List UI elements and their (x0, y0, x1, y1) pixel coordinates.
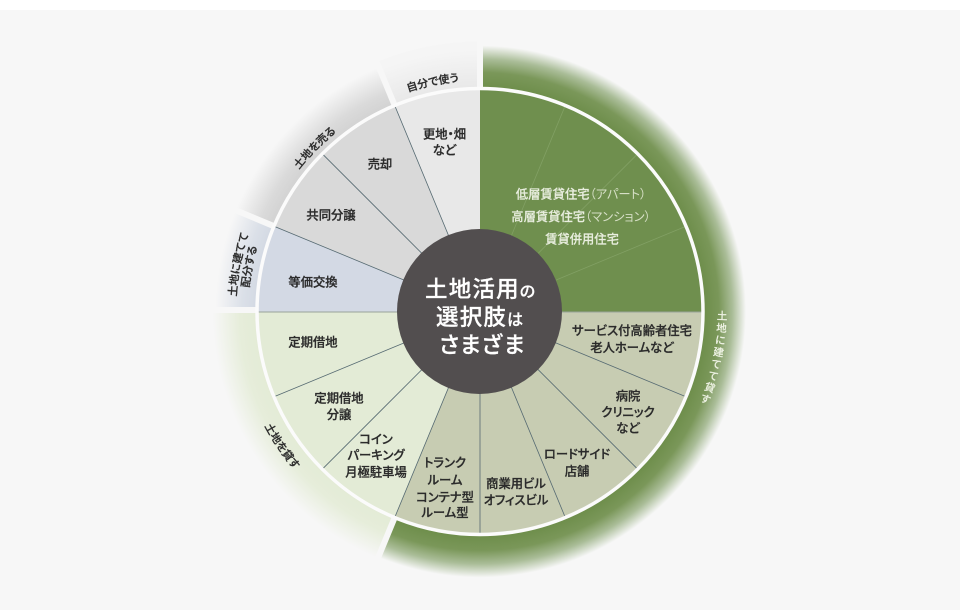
outer label: 土地に建てて貸す: て (710, 358, 722, 372)
band: 土地に建てて貸す (377, 42, 750, 582)
labels: commercial sectors: 商業用ビル (486, 476, 546, 491)
labels: commercial sectors: コンテナ型 (416, 490, 474, 504)
sector: 賃貸住宅 (480, 88, 703, 312)
labels: rental housing: 賃貸併用住宅 (545, 232, 619, 246)
labels: land lease sectors: パーキング (347, 448, 405, 462)
outer label: 土地に建てて貸す: す (698, 392, 712, 407)
outer label: 土地を貸す: 土地を貸す (264, 424, 300, 466)
outer label: 土地に建てて貸す: 建 (712, 345, 725, 360)
title text: 選択肢は (436, 305, 524, 330)
band: 土地を売る (231, 62, 480, 311)
sector: 更地・畑 (395, 88, 480, 312)
center circle title (397, 229, 562, 394)
band: 土地に建てて配分する (210, 208, 480, 312)
outer label: 土地に建てて貸す: て (706, 370, 719, 384)
labels: commercial sectors: 病院 (616, 390, 640, 404)
sector: 売却・共同分譲 (274, 106, 480, 312)
labels: commercial sectors: ロードサイド (544, 448, 610, 462)
labels: exchange, sale, own use sectors: 更地・畑 (423, 126, 466, 142)
title text: さまざま (439, 332, 526, 358)
title text: 土地活用の (425, 277, 536, 302)
labels: commercial sectors: オフィスビル (483, 494, 548, 508)
outer label: 土地に建てて貸す: 地 (716, 321, 728, 335)
labels: land lease sectors: 分譲 (327, 407, 352, 422)
sector: 土地を貸す (257, 312, 480, 518)
outer ring: category bands (206, 38, 750, 582)
labels: commercial sectors: ルーム (427, 474, 462, 488)
labels: commercial sectors (416, 323, 692, 520)
labels: exchange, sale, own use sectors: 共同分譲 (306, 208, 356, 222)
labels: land lease sectors: 定期借地 (314, 390, 364, 406)
outer label: 土地に建てて貸す: 土 (717, 309, 727, 323)
outer label: 土地に建てて貸す (698, 309, 728, 407)
labels: commercial sectors: サービス付高齢者住宅 (572, 323, 692, 338)
labels: land lease sectors: 月極駐車場 (345, 464, 407, 480)
labels: rental housing: 低層賃貸住宅（アパート） (516, 186, 646, 202)
outer label: 土地を売る: 土地を売る (294, 127, 335, 170)
outer label: 土地に建てて配分する: 土地に建てて (227, 232, 248, 296)
labels: exchange, sale, own use sectors: など (433, 144, 458, 158)
sector: 事業用 (395, 312, 703, 534)
outer label: 自分で使う: 自分で使う (407, 73, 458, 92)
labels: exchange, sale, own use sectors (288, 126, 466, 290)
labels: rental housing (511, 186, 651, 246)
labels: commercial sectors: トランク (424, 456, 466, 470)
inner wheel sectors (257, 88, 703, 534)
labels: land lease sectors: 定期借地 (288, 334, 338, 350)
labels: commercial sectors: 店舗 (565, 464, 589, 478)
labels: commercial sectors: など (616, 422, 641, 436)
labels: rental housing: 高層賃貸住宅（マンション） (511, 209, 651, 224)
sector: 等価交換 (257, 226, 480, 312)
band: 土地を貸す (210, 312, 480, 561)
outer label: 土地に建てて配分する: 配分する (240, 246, 257, 288)
band: 自分で使う (377, 42, 480, 312)
outer label: 土地に建てて貸す: に (714, 334, 726, 347)
labels: land lease sectors (288, 334, 407, 480)
labels: exchange, sale, own use sectors: 売却 (368, 156, 392, 172)
labels: exchange, sale, own use sectors: 等価交換 (288, 274, 338, 290)
labels: land lease sectors: コイン (359, 432, 393, 446)
title text (425, 277, 536, 358)
labels: commercial sectors: ルーム型 (421, 506, 469, 520)
labels: commercial sectors: クリニック (601, 406, 655, 420)
labels: commercial sectors: 老人ホームなど (590, 341, 675, 355)
outer label: 土地に建てて貸す: 貸 (703, 380, 717, 396)
